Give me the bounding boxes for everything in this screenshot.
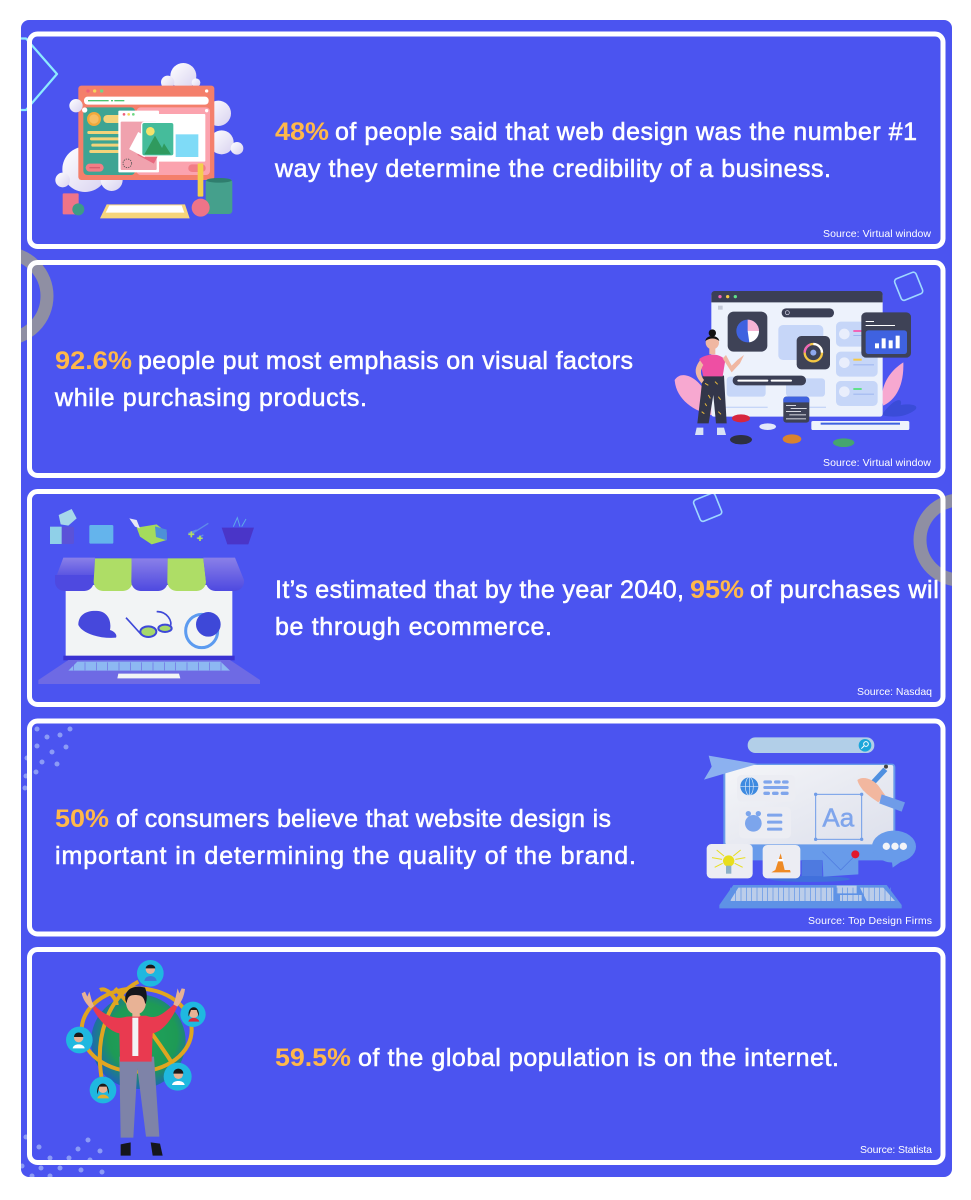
source 2: Source: Virtual window xyxy=(823,457,931,469)
illustration: laptop storefront xyxy=(38,509,260,684)
illustration: web design window with clouds xyxy=(55,63,243,218)
statistic text 5: 59.5% xyxy=(275,1044,351,1072)
statistic text 4: important in determining the quality of the brand. xyxy=(55,842,636,870)
statistic text 2: 92.6% xyxy=(55,347,132,375)
statistic text 2 xyxy=(54,347,633,412)
statistic text 4: of consumers believe that website design is xyxy=(116,805,611,833)
statistic text 5: of the global population is on the internet. xyxy=(358,1044,839,1072)
statistic text 3 xyxy=(275,576,945,641)
panel: card 2 xyxy=(30,262,943,476)
panel: card 4 xyxy=(30,721,943,934)
source 5: Source: Statista xyxy=(860,1144,932,1156)
statistic text 3: It’s estimated that by the year 2040, xyxy=(275,576,684,604)
statistic text 1: 48% xyxy=(275,118,329,146)
illustration: desktop design monitor: Aa xyxy=(822,803,855,833)
source 3: Source: Nasdaq xyxy=(857,686,932,698)
statistic text 1 xyxy=(274,118,917,183)
panel: card 5 xyxy=(30,950,943,1162)
source 1: Source: Virtual window xyxy=(823,228,931,240)
statistic text 1: of people said that web design was the number #1 xyxy=(335,118,917,146)
statistic text 4 xyxy=(55,805,636,870)
panel: card 3 xyxy=(30,492,945,704)
statistic text 1: way they determine the credibility of a business. xyxy=(274,155,831,183)
source 4: Source: Top Design Firms xyxy=(808,915,932,927)
statistic text 2: while purchasing products. xyxy=(54,384,367,412)
illustration: dashboard with woman xyxy=(675,291,916,447)
statistic text 2: people put most emphasis on visual factors xyxy=(138,347,633,375)
statistic text 4: 50% xyxy=(55,805,109,833)
statistic text 3: of purchases will xyxy=(750,576,945,604)
panel: card 1 xyxy=(30,34,943,246)
illustration: man with globe and network xyxy=(66,960,206,1156)
illustration: desktop design monitor xyxy=(704,737,916,908)
statistic text 3: be through ecommerce. xyxy=(275,613,552,641)
statistic text 3: 95% xyxy=(690,576,744,604)
